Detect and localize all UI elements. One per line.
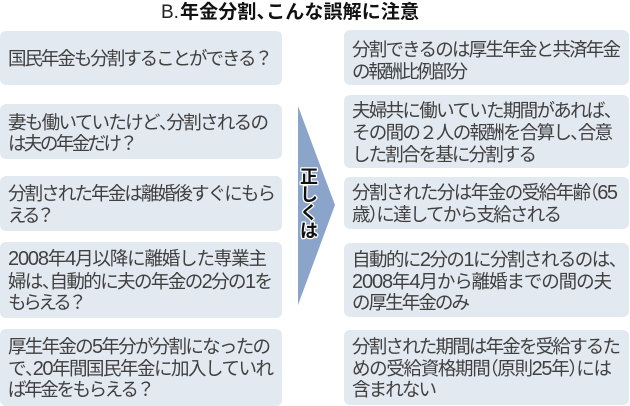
- question 3: える？: [8, 205, 55, 226]
- answer 2: 夫婦共に働いていた期間があれば、: [352, 100, 613, 121]
- arrow: correct answers: [298, 106, 335, 305]
- answer 1: 分割できるのは厚生年金と共済年金: [352, 39, 621, 60]
- question 5: で、20年間国民年金に加入していれ: [8, 358, 274, 380]
- answer 4: [344, 243, 629, 317]
- question 4: 婦は、自動的に夫の年金の2分の1を: [8, 271, 273, 293]
- arrow label: 正しくは: [300, 167, 318, 241]
- question 2: [0, 104, 282, 159]
- answer 2: その間の２人の報酬を合算し、合意: [352, 122, 613, 143]
- question 1: 国民年金も分割することができる？: [8, 48, 273, 69]
- question 2: は夫の年金だけ？: [8, 133, 138, 154]
- answer 3: [344, 177, 629, 229]
- answer 5: 含まれない: [352, 379, 437, 400]
- panel: corrections: [344, 30, 629, 405]
- question 4: [0, 242, 282, 318]
- question 3: 分割された年金は離婚後すぐにもら: [8, 183, 276, 204]
- answer 2: [344, 95, 629, 168]
- question 2: 妻も働いていたけど、分割されるの: [8, 112, 269, 133]
- question 5: [0, 329, 282, 406]
- answer 3: 分割された分は年金の受給年齢（65: [352, 182, 618, 204]
- answer 4: 自動的に2分の1に分割されるのは、: [352, 249, 618, 271]
- answer 5: [344, 330, 629, 405]
- answer 4: の厚生年金のみ: [352, 292, 470, 313]
- question 4: 2008年4月以降に離婚した専業主: [8, 248, 267, 270]
- question 3: [0, 176, 282, 231]
- question 4: もらえる？: [8, 292, 87, 313]
- answer 1: の報酬比例部分: [352, 61, 468, 82]
- question 1: [0, 31, 282, 85]
- panel: misconceptions: [0, 31, 282, 406]
- answer 5: 分割された期間は年金を受給するた: [352, 336, 621, 357]
- answer 5: めの受給資格期間（原則25年）には: [352, 358, 612, 380]
- title: 年金分割、こんな誤解に注意: [180, 0, 419, 23]
- answer 1: [344, 30, 629, 85]
- title: B.: [161, 2, 179, 23]
- answer 4: 2008年4月から離婚までの間の夫: [352, 271, 612, 293]
- answer 3: 歳）に達してから支給される: [352, 204, 562, 225]
- question 5: 厚生年金の5年分が分割になったの: [8, 336, 271, 358]
- answer 2: した割合を基に分割する: [352, 144, 537, 165]
- question 5: ば年金をもらえる？: [8, 379, 155, 400]
